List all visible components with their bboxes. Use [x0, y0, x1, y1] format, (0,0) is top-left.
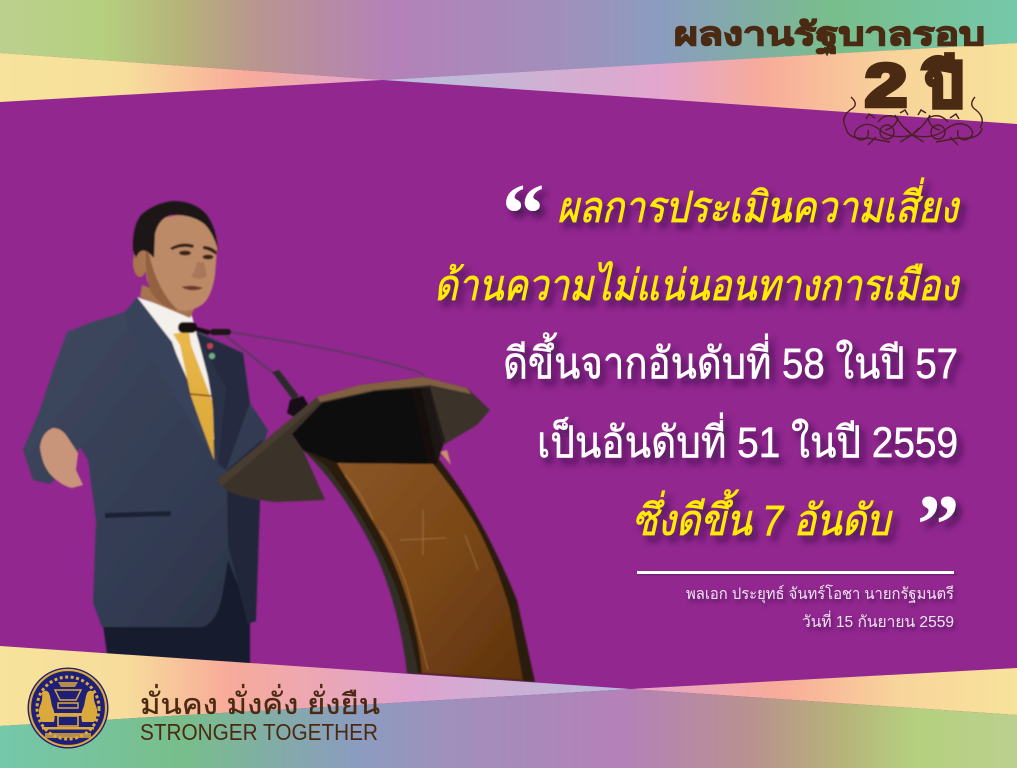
lapels: [125, 297, 214, 462]
facial features: [170, 244, 217, 290]
seal centre emblem: [39, 682, 97, 738]
panel engraving: [345, 475, 478, 670]
neck: [140, 285, 196, 318]
jacket: [23, 312, 268, 627]
face: [144, 215, 217, 311]
shirt collar: [137, 297, 214, 440]
heading: 2 years: 2: [865, 52, 907, 119]
podium column: [303, 450, 535, 682]
wood inlay panel: [337, 463, 523, 680]
line 3: ดีขึ้นจากอันดับที่ 58 ในปี 57: [503, 332, 958, 388]
heading: government results: ผลงานรัฐบาลรอบ: [674, 16, 985, 55]
closing quotation mark: ”: [917, 478, 960, 572]
hand: [40, 428, 83, 488]
line 5: ซึ่งดีขึ้น 7 อันดับ: [632, 489, 893, 545]
line 4: เป็นอันดับที่ 51 ในปี 2559: [537, 413, 958, 467]
slogan: English: STRONGER TOGETHER: [140, 719, 378, 745]
lapel pins: [207, 343, 213, 349]
microphones: [178, 322, 308, 418]
ornament flourish: [844, 97, 982, 145]
photo: prime minister at podium: [23, 201, 535, 682]
jacket shadow side: [227, 440, 262, 624]
trousers: [103, 560, 250, 664]
heading: 2 years: [865, 52, 963, 119]
quote block: [434, 167, 961, 572]
podium top: [217, 377, 490, 502]
pocket: [105, 511, 171, 518]
attribution: date: วันที่ 15 กันยายน 2559: [802, 610, 954, 631]
heading: 2 years: ปี: [922, 52, 963, 119]
attribution: speaker: พลเอก ประยุทธ์ จันทร์โอชา นายกรัฐมนตรี: [686, 584, 954, 604]
icon: government seal: [28, 668, 108, 748]
face shadow: [145, 240, 178, 310]
attribution rule: [637, 571, 954, 574]
hair: [133, 201, 218, 258]
ear: [133, 249, 147, 277]
line 1: ผลการประเมินความเสี่ยง: [557, 177, 961, 232]
chest shadow: [196, 333, 250, 470]
seal lions: [39, 691, 55, 722]
slogan: Thai: มั่นคง มั่งคั่ง ยั่งยืน: [140, 684, 380, 721]
bottom colour bands: [0, 646, 1017, 768]
opening quotation mark: “: [502, 167, 544, 261]
thumb: [440, 450, 451, 465]
microphone wires: [225, 332, 424, 376]
necktie: [173, 331, 214, 460]
